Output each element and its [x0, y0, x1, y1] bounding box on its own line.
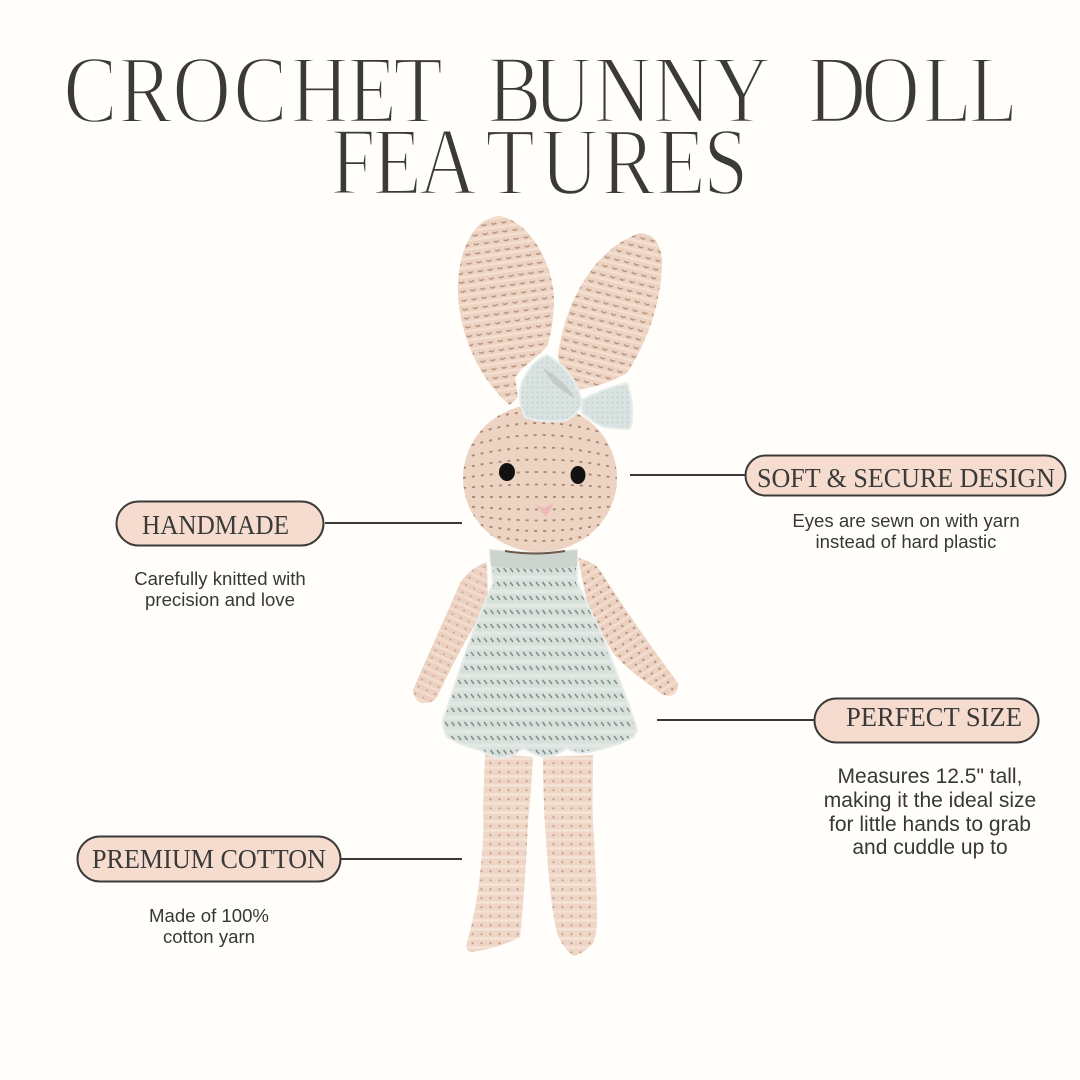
- left ear: [458, 216, 554, 405]
- illustration: crochet bunny doll: [413, 216, 678, 956]
- left leg: [466, 753, 533, 952]
- callout: handmade: [116, 502, 462, 610]
- head: [463, 404, 617, 552]
- dress collar: [490, 550, 577, 569]
- callout: perfect size: and cuddle up to: [852, 836, 1008, 859]
- callout: perfect size: Measures 12.5" tall,: [838, 765, 1022, 788]
- callout: perfect size: [657, 698, 1038, 859]
- callout: perfect size: for little hands to grab: [829, 813, 1031, 836]
- title: [64, 38, 1018, 216]
- bow: [520, 355, 632, 429]
- callout: perfect size: making it the ideal size: [824, 789, 1036, 812]
- callout: soft and secure design: [630, 456, 1066, 552]
- callout: premium cotton: cotton yarn: [163, 926, 255, 947]
- callout: handmade: HANDMADE: [142, 510, 289, 540]
- right ear: [558, 233, 662, 390]
- neck shadow: [505, 551, 565, 554]
- callout: premium cotton: Made of 100%: [149, 905, 269, 926]
- callout: soft and secure design: SOFT & SECURE DESIGN: [757, 463, 1055, 493]
- right leg: [543, 755, 597, 956]
- dress: [443, 550, 637, 758]
- callout: soft and secure design: Eyes are sewn on with yarn: [792, 510, 1020, 531]
- knit rows: [463, 412, 617, 541]
- right arm: [578, 558, 678, 696]
- callout: soft and secure design: instead of hard plastic: [816, 531, 996, 552]
- callout: handmade: Carefully knitted with: [134, 568, 306, 589]
- nose: [536, 503, 554, 517]
- title: FEATURES: [330, 110, 748, 216]
- eyes: [499, 463, 586, 484]
- left arm: [413, 562, 488, 703]
- callout: handmade: precision and love: [145, 589, 295, 610]
- callout: premium cotton: [78, 836, 462, 947]
- title: CROCHET BUNNY DOLL: [64, 38, 1018, 144]
- callout: premium cotton: PREMIUM COTTON: [92, 844, 326, 874]
- callout: perfect size: PERFECT SIZE: [846, 702, 1022, 732]
